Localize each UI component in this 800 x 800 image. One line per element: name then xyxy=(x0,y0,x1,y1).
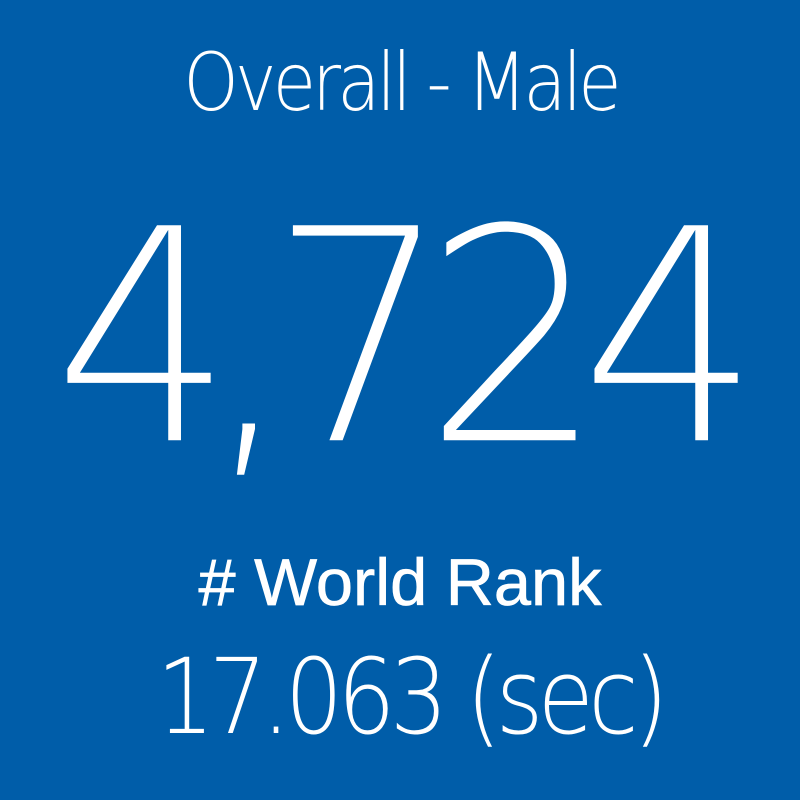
big number: world rank value: 4,724 xyxy=(53,166,761,511)
title: Overall - Male xyxy=(183,36,622,129)
metric label: # World Rank xyxy=(198,545,602,619)
time value: 17.063 (sec) xyxy=(156,637,669,758)
